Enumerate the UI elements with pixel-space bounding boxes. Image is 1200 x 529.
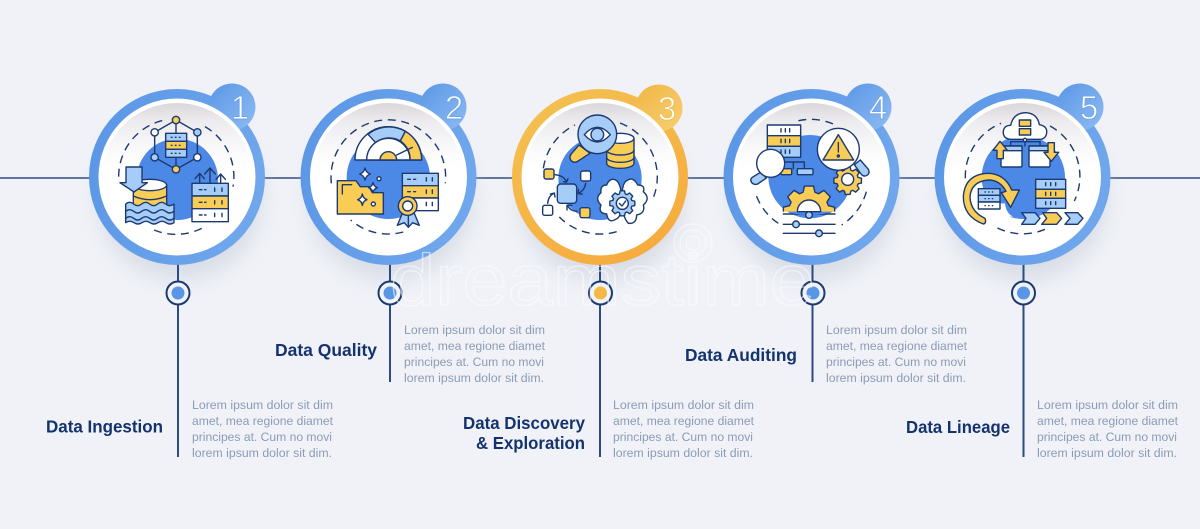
number badge [1056, 84, 1104, 130]
number badge [420, 84, 466, 130]
title: Data Ingestion [46, 416, 163, 436]
description line 4: lorem ipsum dolor sit dim. [404, 371, 544, 385]
connector and node [802, 262, 824, 382]
icon: data lineage [963, 113, 1083, 234]
title: Data Quality [275, 340, 377, 360]
description line 2: amet, mea regione diamet [192, 414, 334, 428]
watermark: dreamstime [390, 241, 815, 321]
drop shadow [98, 116, 262, 280]
description: Lorem ipsum dolor sit dim [613, 398, 754, 412]
drop shadow [520, 116, 684, 280]
connector and node [589, 262, 612, 457]
number badge [844, 84, 892, 130]
title: Data Auditing [685, 345, 797, 365]
number badge: 4 [869, 89, 887, 126]
description line 4: lorem ipsum dolor sit dim. [826, 371, 966, 385]
title: & Exploration [476, 433, 585, 453]
description line 4: lorem ipsum dolor sit dim. [613, 446, 753, 460]
description line 2: amet, mea regione diamet [613, 414, 755, 428]
description line 3: principes at. Cum no movi [192, 430, 332, 444]
panel: Data Discovery & Exploration [463, 84, 755, 460]
title: Data Lineage [906, 417, 1010, 437]
description: Lorem ipsum dolor sit dim [192, 398, 333, 412]
ring [89, 89, 265, 265]
description: Lorem ipsum dolor sit dim [826, 323, 967, 337]
description line 2: amet, mea regione diamet [826, 339, 968, 353]
ring [934, 89, 1110, 265]
description line 3: principes at. Cum no movi [613, 430, 753, 444]
description line 4: lorem ipsum dolor sit dim. [1037, 446, 1177, 460]
description line 3: principes at. Cum no movi [826, 355, 966, 369]
number badge: 2 [445, 89, 463, 126]
connector and node [166, 262, 190, 457]
ring [724, 89, 900, 265]
title: Data Discovery [463, 413, 585, 433]
drop shadow [732, 116, 896, 280]
panel: Data Quality [275, 84, 546, 385]
description line 3: principes at. Cum no movi [404, 355, 544, 369]
icon: data quality [331, 120, 446, 234]
panel: Data Lineage [906, 84, 1179, 460]
icon: data discovery [543, 115, 657, 234]
inner disc [98, 98, 256, 256]
inner disc [522, 98, 678, 256]
connector and node [1012, 262, 1035, 457]
inner disc [310, 98, 467, 256]
description line 4: lorem ipsum dolor sit dim. [192, 446, 332, 460]
icon: data auditing [751, 119, 869, 237]
inner disc [733, 98, 890, 256]
number badge: 1 [231, 89, 249, 126]
number badge [208, 84, 256, 130]
connector and node [378, 262, 402, 382]
inner disc [944, 98, 1101, 256]
ring [512, 89, 688, 265]
description line 2: amet, mea regione diamet [404, 339, 546, 353]
description line 3: principes at. Cum no movi [1037, 430, 1177, 444]
title [463, 413, 585, 453]
drop shadow [943, 116, 1107, 280]
ring [300, 89, 476, 265]
description line 2: amet, mea regione diamet [1037, 414, 1179, 428]
timeline axis [0, 177, 1200, 179]
drop shadow [309, 116, 473, 280]
number badge: 5 [1080, 89, 1098, 126]
panel: Data Ingestion [46, 84, 334, 460]
number badge: 3 [658, 90, 676, 127]
panel: Data Auditing [685, 84, 968, 385]
description: Lorem ipsum dolor sit dim [404, 323, 545, 337]
description: Lorem ipsum dolor sit dim [1037, 398, 1178, 412]
number badge [636, 84, 682, 132]
icon: data ingestion [119, 116, 234, 234]
